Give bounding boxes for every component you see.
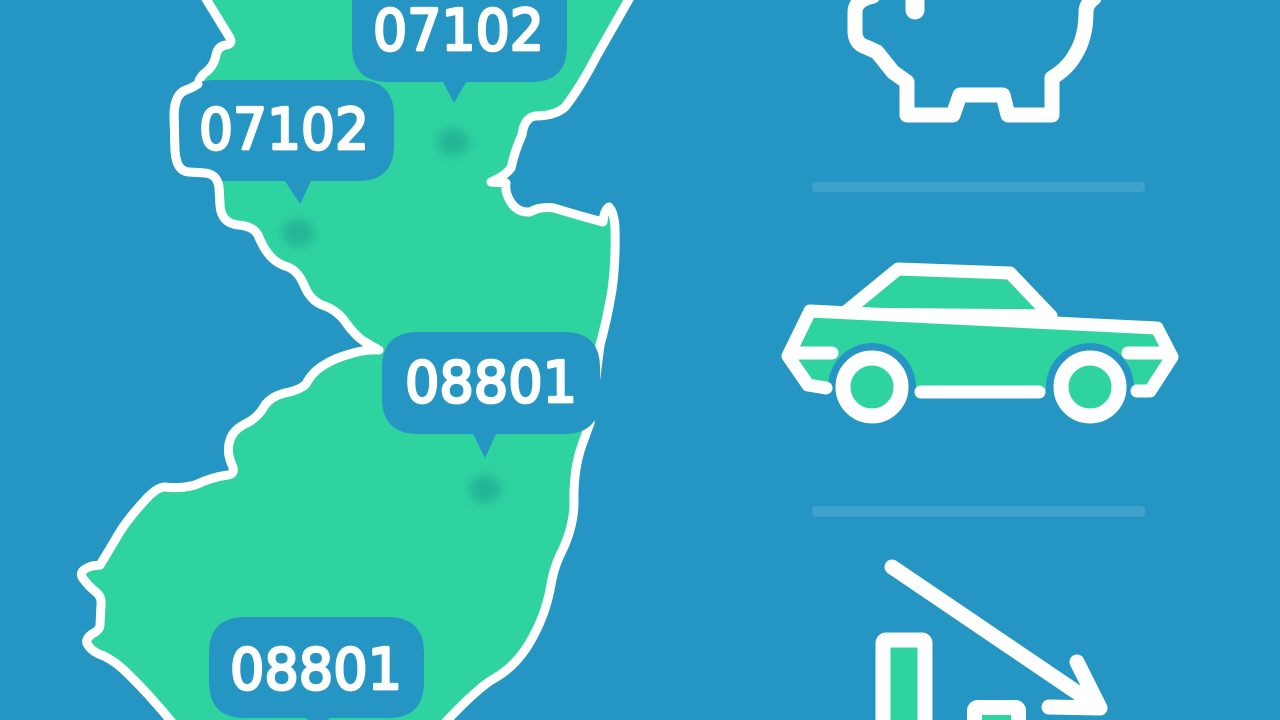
ZIP callout 08801 centre bbox=[382, 332, 600, 458]
outline segment over callout bbox=[174, 84, 220, 205]
ZIP callout 07102 top bbox=[352, 0, 567, 103]
coin slot bbox=[906, 0, 924, 10]
location dot: centre bbox=[469, 475, 501, 503]
ZIP callout 07102 left: 07102 bbox=[199, 97, 369, 163]
divider 1 bbox=[812, 182, 1145, 192]
ZIP callout 08801 bottom bbox=[209, 617, 424, 720]
ZIP callout 07102 left bbox=[174, 80, 394, 205]
icon: piggy bank bbox=[855, 0, 1094, 115]
car trim bars bbox=[793, 353, 1168, 392]
wheel arches bbox=[828, 343, 916, 431]
tall bar bbox=[883, 640, 925, 720]
car body fill bbox=[788, 311, 1172, 391]
ZIP callout 08801 bottom: 08801 bbox=[230, 637, 402, 703]
divider 2 bbox=[812, 506, 1145, 517]
map of the state bbox=[81, 0, 632, 720]
short bar bbox=[974, 708, 1018, 720]
icon: car bbox=[788, 269, 1172, 431]
icon: falling costs chart bbox=[883, 567, 1100, 720]
location dot: north-east bbox=[437, 128, 469, 156]
downward arrow bbox=[892, 567, 1100, 708]
map outline bbox=[81, 0, 632, 720]
location dot: north-west bbox=[282, 219, 314, 247]
ZIP callout 08801 centre: 08801 bbox=[405, 350, 577, 416]
car body outline bbox=[788, 311, 1172, 391]
car cabin bbox=[843, 269, 1051, 316]
front wheel bbox=[843, 358, 901, 416]
rear wheel bbox=[1061, 358, 1119, 416]
